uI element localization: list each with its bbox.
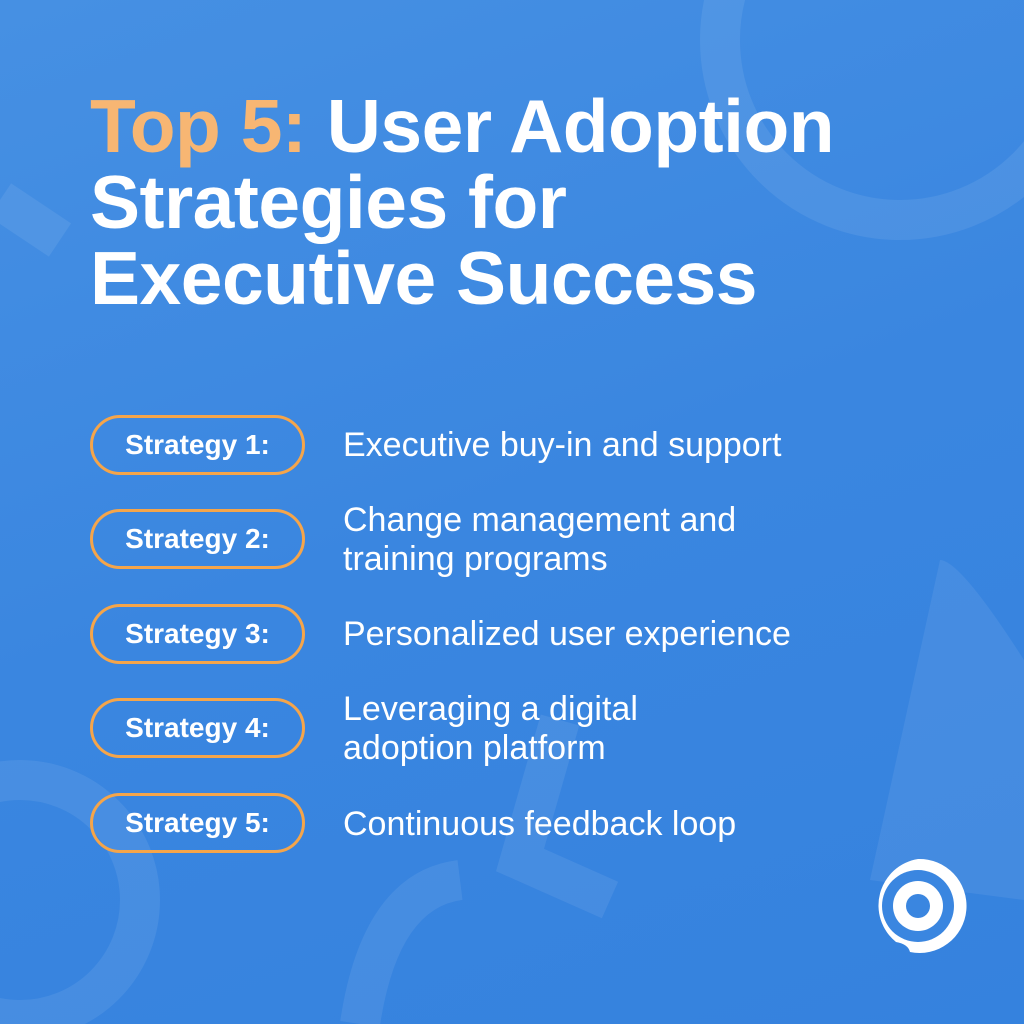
text: Continuous feedback loop xyxy=(343,805,736,843)
title: Executive Success xyxy=(90,236,757,320)
text: Executive buy-in and support xyxy=(343,426,781,464)
text: Leveraging a digital xyxy=(343,690,638,728)
strategy 3 xyxy=(90,604,791,664)
text: Strategy 3: xyxy=(125,618,270,649)
strategy 2 xyxy=(90,501,736,578)
text: Strategy 5: xyxy=(125,807,270,838)
strategy 5 xyxy=(90,793,736,853)
text: training programs xyxy=(343,540,608,578)
title xyxy=(90,84,834,320)
title: Top 5: User Adoption xyxy=(90,84,834,168)
title: Strategies for xyxy=(90,160,566,244)
text: Strategy 2: xyxy=(125,523,270,554)
text: adoption platform xyxy=(343,729,606,767)
strategy 1 xyxy=(90,415,782,475)
text: Change management and xyxy=(343,501,736,539)
icon: logo xyxy=(878,859,966,953)
text: Strategy 1: xyxy=(125,429,270,460)
strategy 4 xyxy=(90,690,638,767)
text: Personalized user experience xyxy=(343,615,791,653)
text: Strategy 4: xyxy=(125,712,270,743)
